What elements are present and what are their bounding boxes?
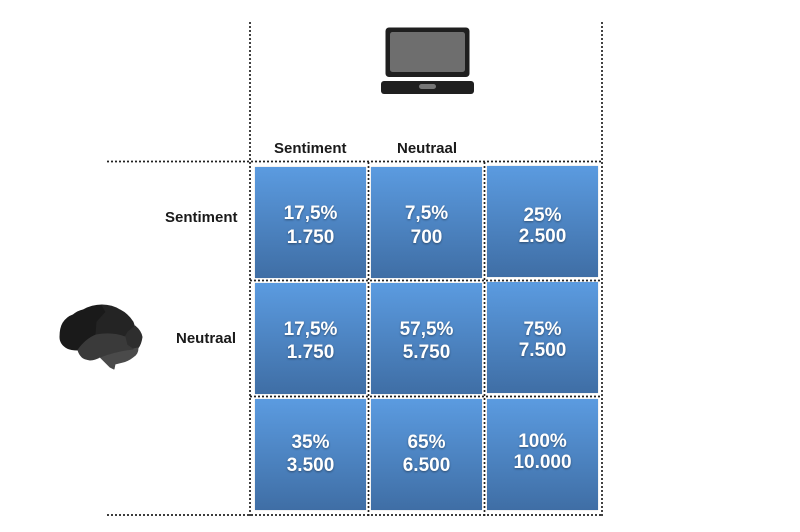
cell: neutraal/neutraal — [371, 283, 482, 394]
cell: neutraal column total — [371, 399, 482, 510]
cell: neutraal/sentiment: 1.750 — [287, 342, 334, 363]
cell: sentiment/neutraal: 7,5% — [405, 203, 448, 224]
cell: sentiment/sentiment: 17,5% — [284, 203, 337, 224]
cell: grand total: 100% — [518, 431, 567, 452]
cell: neutraal column total: 6.500 — [403, 455, 450, 476]
cell: neutraal/sentiment: 17,5% — [284, 319, 337, 340]
column label: Sentiment: Sentiment — [274, 140, 347, 157]
cell: neutraal column total: 65% — [407, 432, 446, 453]
row label: Sentiment: Sentiment — [165, 209, 238, 226]
row label: Neutraal: Neutraal — [176, 330, 236, 347]
cell: sentiment/neutraal: 700 — [411, 227, 442, 248]
cell: sentiment/sentiment — [255, 167, 366, 278]
cell: neutraal/neutraal: 5.750 — [403, 342, 450, 363]
cell: sentiment total: 25% — [523, 205, 562, 226]
cell: neutraal/sentiment — [255, 283, 366, 394]
cell: neutraal total: 75% — [523, 319, 562, 340]
cell: sentiment/sentiment: 1.750 — [287, 227, 334, 248]
cell: neutraal total — [487, 282, 598, 393]
cell: sentiment total — [487, 166, 598, 277]
cell: neutraal/neutraal: 57,5% — [400, 319, 453, 340]
cell: sentiment total: 2.500 — [519, 226, 566, 247]
cell: sentiment column total: 3.500 — [287, 455, 334, 476]
column label: Neutraal: Neutraal — [397, 140, 457, 157]
cell: sentiment/neutraal — [371, 167, 482, 278]
cell: sentiment column total: 35% — [291, 432, 330, 453]
cell: grand total — [487, 399, 598, 510]
cell: sentiment column total — [255, 399, 366, 510]
cell: neutraal total: 7.500 — [519, 340, 566, 361]
cell: grand total: 10.000 — [513, 452, 572, 473]
